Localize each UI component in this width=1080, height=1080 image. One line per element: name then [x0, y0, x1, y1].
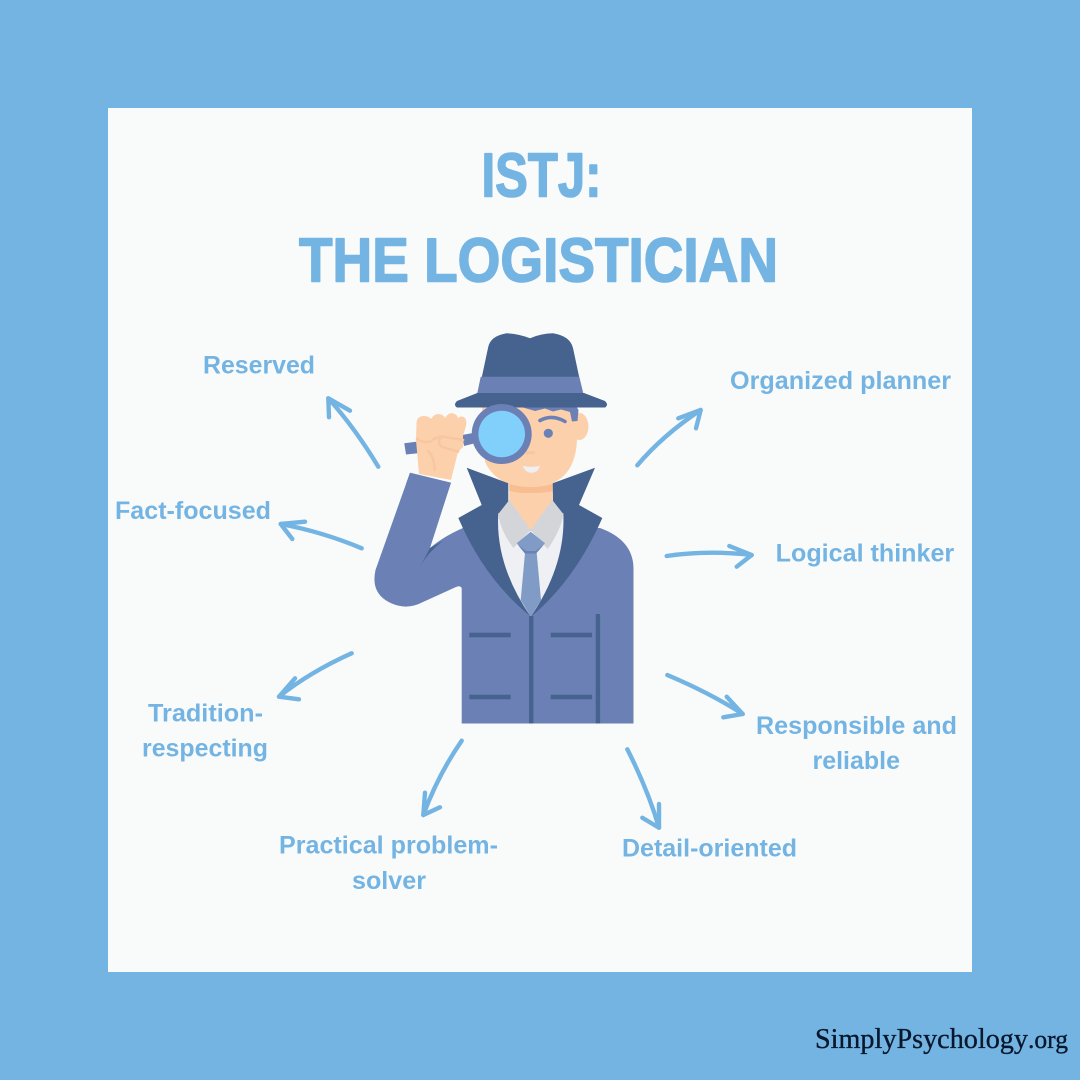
panel: white card [108, 108, 972, 972]
icon: jacket [374, 473, 634, 724]
label: Responsible and reliable: Responsible and [756, 712, 957, 740]
label: Tradition-respecting [142, 700, 268, 762]
label: Practical problem-solver: Practical problem- [279, 832, 498, 860]
arrow: to Logical thinker [667, 546, 752, 567]
arrow: to Organized planner [637, 410, 701, 465]
icon: magnifying glass [472, 404, 532, 464]
icon: arm crease [420, 541, 443, 567]
icon: shirt [498, 513, 563, 617]
title: ISTJ: [482, 142, 602, 211]
icon: tie [517, 532, 545, 617]
icon: ear [570, 413, 588, 440]
icon: neck shadow [509, 484, 553, 494]
icon: fist [416, 413, 466, 480]
label: Tradition-respecting: Tradition- [148, 700, 263, 728]
icon: neck [509, 480, 553, 531]
icon: eye [544, 429, 553, 438]
icon: collar lapels [458, 468, 602, 617]
icon: magnifier handle [404, 433, 476, 454]
icon: smile [523, 466, 540, 473]
label: Detail-oriented: Detail-oriented [622, 835, 797, 863]
label: Practical problem-solver [279, 832, 498, 895]
icon: neck skin over collar [509, 493, 553, 531]
icon: left shirt collar [498, 500, 531, 548]
icon: right shirt collar [531, 500, 563, 549]
title: THE LOGISTICIAN [299, 227, 778, 296]
label: Tradition-respecting: respecting [142, 734, 268, 762]
label: Responsible and reliable: reliable [812, 747, 900, 775]
icon: hair [518, 406, 578, 422]
icon: face [482, 405, 577, 487]
label: Practical problem-solver: solver [352, 867, 426, 895]
footer: source credit: .org [1028, 1025, 1068, 1054]
label: Reserved: Reserved [203, 351, 315, 379]
arrow: to Reserved [328, 398, 378, 467]
arrow: to Responsible and reliable [667, 675, 743, 717]
arrow: to Tradition-respecting [279, 653, 352, 699]
icon: sleeve cuff overlap [406, 473, 451, 494]
icon: jacket stitching and pockets [469, 614, 600, 724]
icon: eyebrow [540, 417, 565, 422]
title [299, 142, 778, 296]
arrow: to Fact-focused [281, 522, 362, 548]
icon: nose [526, 451, 535, 454]
label: Fact-focused: Fact-focused [115, 497, 271, 525]
label: Logical thinker: Logical thinker [776, 540, 954, 568]
footer: source credit: SimplyPsychology [815, 1023, 1028, 1055]
arrow: to Practical problem-solver [423, 741, 462, 815]
illustration: detective with magnifying glass [374, 333, 634, 724]
icon: hat [455, 333, 607, 408]
label: Responsible and reliable [756, 712, 957, 775]
label: Organized planner: Organized planner [730, 367, 951, 395]
arrow: to Detail-oriented [627, 749, 659, 828]
